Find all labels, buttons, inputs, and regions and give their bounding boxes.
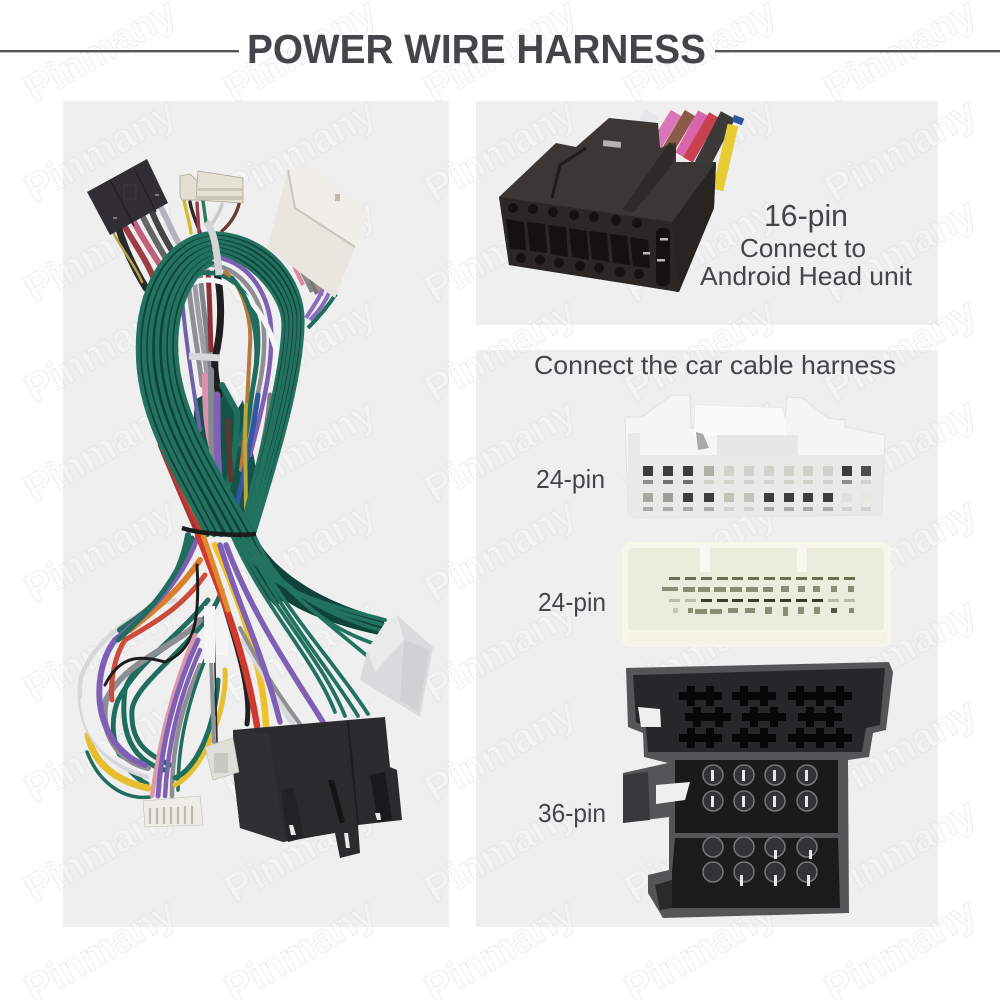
small white connector mid (205, 738, 239, 780)
center inner wires (181, 272, 237, 495)
black connector bottom (233, 717, 402, 858)
heading: connect the car cable harness: Connect the car cable harness (534, 350, 896, 380)
watermark grid: Pinmany (617, 590, 784, 712)
top label (603, 140, 621, 148)
watermark grid: Pinmany (217, 190, 384, 312)
watermark grid: Pinmany (617, 290, 784, 412)
watermark grid: Pinmany (417, 790, 584, 912)
connector: first 24-pin white (625, 395, 885, 518)
label: android head unit: Android Head unit (700, 261, 913, 291)
cable tie middle (189, 356, 220, 358)
watermark grid: Pinmany (817, 590, 984, 712)
watermark grid: Pinmany (617, 690, 784, 812)
round pin sockets (703, 765, 817, 882)
watermark grid: Pinmany (817, 490, 984, 612)
cable tie top (206, 222, 219, 275)
label: 16-pin: 16-pin (764, 198, 848, 233)
rail grooves (552, 148, 586, 198)
white connector right (360, 615, 433, 717)
watermark grid: Pinmany (817, 690, 984, 812)
watermark grid: Pinmany (617, 490, 784, 612)
watermark grid: Pinmany (217, 490, 384, 612)
green loop band base (136, 232, 256, 535)
label: connect to: Connect to (740, 233, 866, 263)
illustration: wire harness (80, 159, 433, 858)
watermark grid: Pinmany (417, 390, 584, 512)
watermark grid: Pinmany (217, 790, 384, 912)
watermark grid: Pinmany (17, 90, 184, 212)
right fan green wires (232, 535, 385, 716)
watermark grid: Pinmany (17, 490, 184, 612)
wires from top-left connector (113, 206, 178, 288)
small white connector bottom-left (143, 796, 203, 827)
watermark grid: Pinmany (817, 290, 984, 412)
connector: second 24-pin cream (622, 542, 891, 647)
watermark grid: Pinmany (17, 590, 184, 712)
illustration: 16-pin connector (499, 113, 743, 292)
watermark grid: Pinmany (617, 190, 784, 312)
small white connector top (180, 171, 243, 203)
watermark grid: Pinmany (217, 590, 384, 712)
watermark grid: Pinmany (217, 690, 384, 812)
lower left loop wires (80, 535, 225, 797)
top-left black connector (87, 159, 168, 235)
watermark grid: Pinmany (217, 290, 384, 412)
watermark grid: Pinmany (17, 390, 184, 512)
connector body (499, 118, 716, 292)
red yellow wires outside bundle (160, 445, 208, 535)
watermark grid: Pinmany (417, 490, 584, 612)
green loop wires left (138, 233, 253, 535)
watermark grid: Pinmany (417, 290, 584, 412)
metal pins (643, 238, 668, 262)
watermark grid: Pinmany (17, 190, 184, 312)
watermark grid: Pinmany (617, 90, 784, 212)
right band base (216, 232, 304, 532)
watermark grid: Pinmany (417, 690, 584, 812)
watermark grid: Pinmany (817, 90, 984, 212)
label: 24-pin first: 24-pin (536, 464, 605, 494)
label: 36-pin: 36-pin (538, 798, 606, 828)
wires from small white connector (184, 200, 239, 233)
panel: 16-pin connector (476, 101, 938, 325)
watermark grid: Pinmany (17, 290, 184, 412)
connector latch (622, 142, 676, 212)
watermark grid: Pinmany (817, 190, 984, 312)
watermark grid: Pinmany (417, 90, 584, 212)
watermark grid: Pinmany (617, 790, 784, 912)
panel: car cable connectors (476, 350, 938, 927)
white connector top wires (292, 262, 336, 328)
connector front face (499, 197, 679, 292)
green loop wires right (216, 233, 303, 532)
watermark grid: Pinmany (817, 790, 984, 912)
pin holes top block crosses (679, 686, 852, 748)
cable tie black (182, 528, 256, 535)
right fan base (232, 535, 384, 636)
vertical tagged wire (204, 606, 228, 742)
watermark grid: Pinmany (817, 390, 984, 512)
watermark grid: Pinmany (617, 390, 784, 512)
connector: 36-pin black (623, 662, 893, 918)
watermark grid: Pinmany (17, 690, 184, 812)
panel-coloured notches in 36-pin (638, 707, 661, 727)
connector side (672, 162, 716, 292)
label: 24-pin second: 24-pin (538, 587, 606, 617)
watermark grid: Pinmany (417, 190, 584, 312)
metal contacts (711, 770, 812, 886)
white connector top body (267, 165, 368, 298)
wires behind connector (640, 113, 743, 190)
watermark grid: Pinmany (217, 90, 384, 212)
watermark grid: Pinmany (17, 790, 184, 912)
loop inner colored wires right (176, 257, 278, 515)
watermark grid: Pinmany (217, 390, 384, 512)
center fan wires (198, 535, 323, 726)
title with rules: POWER WIRE HARNESS (247, 26, 706, 72)
pin holes (506, 203, 670, 286)
panel: harness photo (63, 101, 449, 927)
watermark grid: Pinmany (417, 590, 584, 712)
base fill under loop (190, 383, 262, 535)
